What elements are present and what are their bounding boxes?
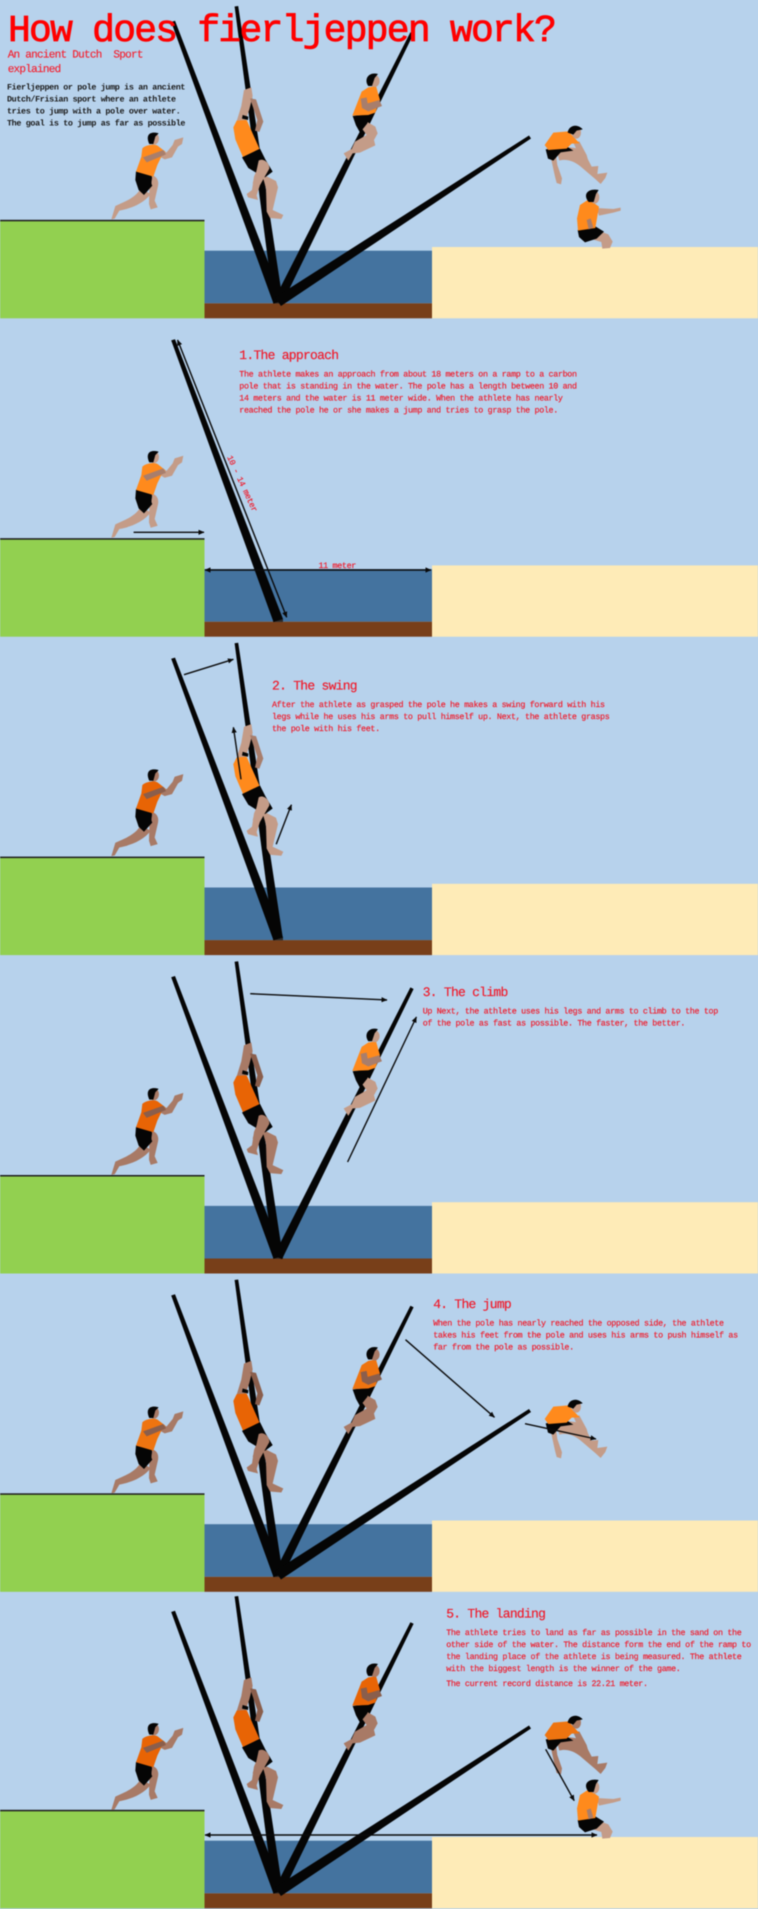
athlete: run-up — [111, 1088, 183, 1175]
body text: takes his feet from the pole and uses his arms to push himself as — [433, 1330, 738, 1340]
body text — [239, 370, 577, 416]
label: pole length: 10 - 14 meter — [224, 454, 259, 514]
body text: the pole with his feet. — [272, 724, 380, 734]
body text — [423, 1006, 718, 1028]
athlete: run-up — [111, 769, 183, 856]
label: water width: 11 meter — [318, 561, 356, 571]
athlete: run-up — [111, 1407, 183, 1493]
heading: 2. The swing — [272, 678, 357, 694]
poles — [171, 1280, 531, 1580]
athlete: climb — [344, 1663, 382, 1751]
arrow: arms pull — [233, 727, 241, 779]
ground — [0, 857, 758, 955]
body text: The athlete makes an approach from about 18 meters on a ramp to a carbon — [239, 370, 577, 380]
intro text: Dutch/Frisian sport where an athlete — [7, 94, 176, 104]
ground — [0, 1175, 758, 1274]
intro text: The goal is to jump as far as possible — [7, 118, 185, 128]
body text — [433, 1318, 738, 1352]
athlete: climb — [344, 1347, 382, 1434]
arrow: measured distance — [205, 1834, 597, 1836]
athlete: climb — [344, 73, 382, 161]
body text: with the biggest length is the winner of the game. — [446, 1664, 680, 1674]
body text: the landing place of the athlete is being measured. The athlete — [446, 1652, 742, 1662]
heading: 4. The jump — [433, 1297, 511, 1312]
ground — [0, 1810, 758, 1908]
body text: legs while he uses his arms to pull himself up. Next, the athlete grasps — [272, 712, 610, 722]
body text: The athlete tries to land as far as possible in the sand on the — [446, 1628, 742, 1638]
poles — [171, 643, 283, 940]
athlete: climb — [344, 1029, 382, 1116]
body text: other side of the water. The distance form the end of the ramp to — [446, 1640, 751, 1650]
panel: 1. the approach — [0, 339, 758, 637]
athlete: swing — [233, 724, 283, 856]
athlete: swing — [233, 1677, 283, 1809]
arrow: pole length — [178, 340, 287, 617]
body text: When the pole has nearly reached the opposed side, the athlete — [433, 1318, 724, 1328]
panel: 2. the swing — [0, 643, 758, 955]
body text — [272, 700, 610, 734]
panel: 5. the landing — [0, 1596, 758, 1908]
body text: After the athlete as grasped the pole he makes a swing forward with his — [272, 700, 605, 710]
athlete: jump — [545, 1716, 607, 1774]
arrow: pole swing — [184, 659, 233, 675]
body text: pole that is standing in the water. The pole has a length between 10 and — [239, 382, 577, 392]
subtitle: An ancient Dutch Sport — [8, 50, 143, 62]
ground — [0, 1493, 758, 1592]
arrow: push off — [525, 1424, 596, 1439]
subtitle: explained — [8, 64, 61, 76]
arrow: pole to athlete — [406, 1340, 494, 1417]
ground: ramp, water and sand — [0, 220, 758, 318]
arrow: legs swing — [276, 805, 291, 844]
body text: of the pole as fast as possible. The faster, the better. — [423, 1018, 685, 1028]
body text: Up Next, the athlete uses his legs and arms to climb to the top — [423, 1006, 718, 1016]
athlete: landing — [577, 1780, 621, 1839]
poles — [171, 1596, 531, 1896]
athlete: run-up — [111, 1723, 183, 1810]
intro text: tries to jump with a pole over water. — [7, 106, 180, 116]
athlete: jump — [545, 1400, 607, 1458]
ground — [0, 538, 758, 637]
poles — [171, 961, 414, 1259]
athlete: run-up — [111, 451, 183, 538]
athlete: run-up — [111, 133, 183, 219]
athlete: swing — [233, 87, 283, 219]
arrow: water width — [205, 569, 431, 571]
panel: 4. the jump — [0, 1280, 758, 1592]
athlete: swing — [233, 1043, 283, 1174]
poles — [171, 6, 531, 306]
body text: The current record distance is 22.21 meter. — [446, 1679, 648, 1689]
body text: 14 meters and the water is 11 meter wide. When the athlete has nearly — [239, 394, 563, 404]
body text — [446, 1628, 751, 1689]
intro text: Fierljeppen or pole jump is an ancient — [7, 82, 185, 92]
athlete: landing — [577, 190, 621, 249]
arrow: run direction — [134, 531, 204, 533]
athlete: swing — [233, 1361, 283, 1492]
subtitle — [8, 50, 143, 76]
arrow: pole swing — [250, 994, 387, 1000]
heading: 5. The landing — [446, 1606, 545, 1622]
panel: 3. the climb — [0, 961, 758, 1274]
body text: reached the pole he or she makes a jump and tries to grasp the pole. — [239, 406, 558, 416]
body text: far from the pole as possible. — [433, 1342, 574, 1352]
title: How does fierljeppen work? — [8, 10, 555, 53]
intro text — [7, 82, 185, 128]
pole — [171, 339, 283, 622]
heading: 3. The climb — [423, 985, 508, 1000]
heading: 1.The approach — [239, 348, 338, 363]
arrow: falling — [546, 1749, 574, 1801]
arrow: climbing direction — [348, 1017, 416, 1162]
athlete: jump — [545, 126, 607, 184]
